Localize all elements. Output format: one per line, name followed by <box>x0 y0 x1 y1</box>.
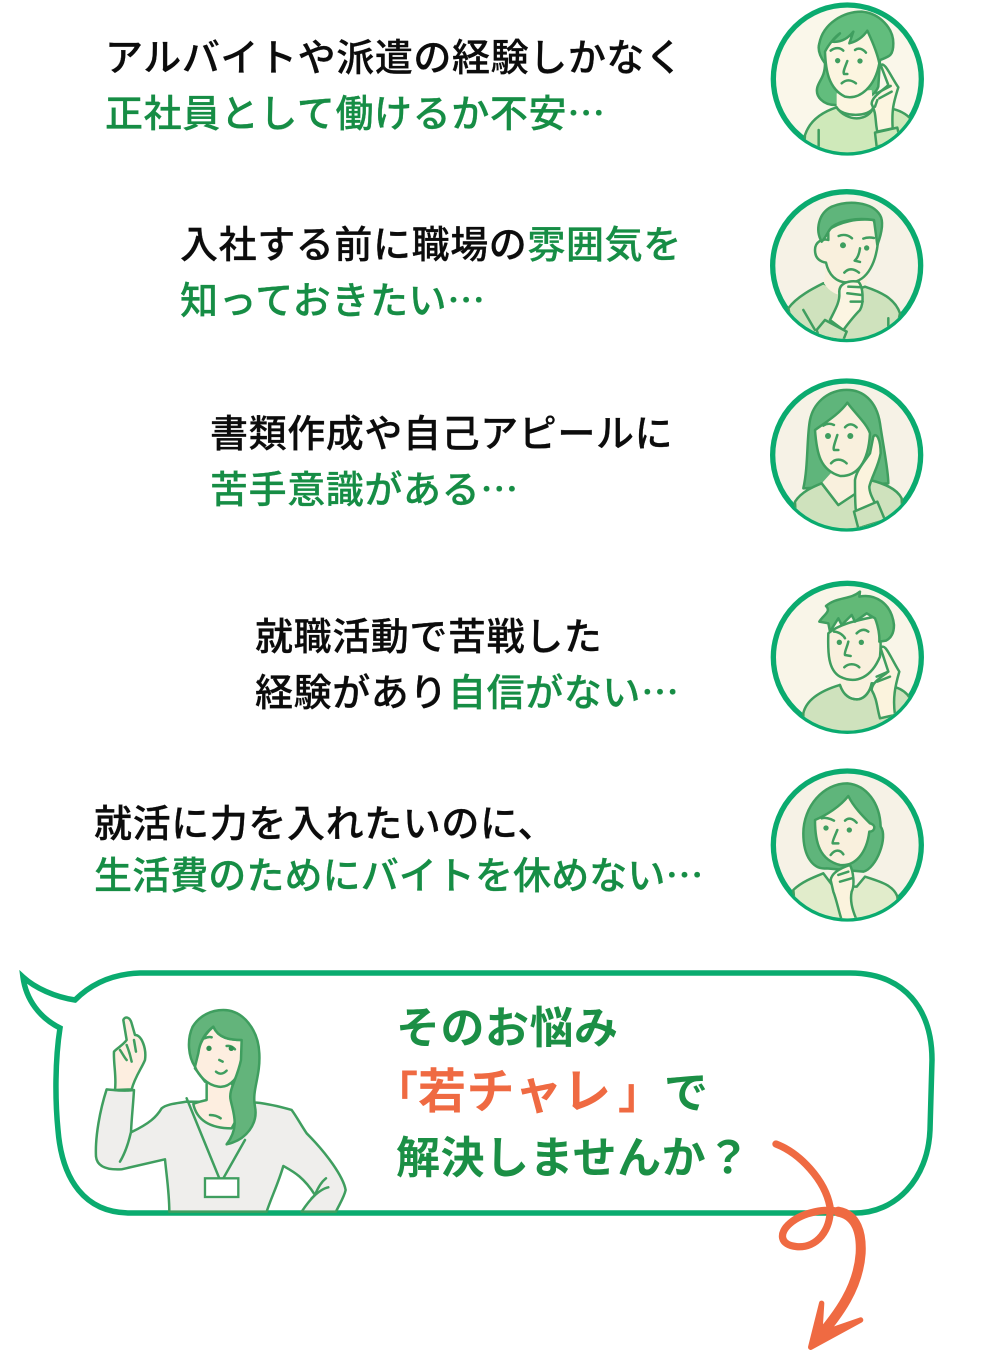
heading: call to action: 」 <box>618 1069 662 1118</box>
text: worry 4: 就職活動で苦戦した <box>255 617 602 659</box>
heading: call to action: そのお悩み <box>396 1004 618 1053</box>
icon: worried man touching his temple <box>773 583 921 737</box>
icon: worried woman touching her temple <box>773 5 921 160</box>
text: worry 1: アルバイトや派遣の経験しかなく <box>105 38 684 80</box>
heading: call to action: 解決しませんか？ <box>396 1134 751 1183</box>
text: worry 3: 書類作成や自己アピールに <box>210 414 673 456</box>
text: worry 4: 自信がない… <box>448 662 680 717</box>
text: worry 5: 生活費のためにバイトを休めない… <box>94 845 704 900</box>
icon: bob-haired woman with hand on chin <box>773 771 921 927</box>
heading: call to action: 若チャレ <box>418 1066 612 1119</box>
text: worry 2: 知っておきたい… <box>180 270 486 325</box>
text: worry 1: 正社員として働けるか不安… <box>105 83 606 138</box>
heading: call to action <box>374 1004 751 1183</box>
icon: long-haired woman with hand on cheek <box>773 381 921 537</box>
arrow: orange curl pointing down <box>776 1144 861 1347</box>
icon: thinking man with hand on chin <box>773 192 921 347</box>
text: worry 4: 経験があり <box>255 673 448 715</box>
speech bubble <box>23 973 932 1213</box>
illustration: staff woman pointing upward <box>96 1010 346 1212</box>
text: worry 3: 苦手意識がある… <box>210 459 519 514</box>
text: worry 2: 入社する前に職場の雰囲気を <box>180 225 682 267</box>
heading: call to action: で <box>664 1069 708 1118</box>
heading: call to action: 「 <box>374 1069 418 1118</box>
text: worry 5: 就活に力を入れたいのに、 <box>94 804 556 846</box>
